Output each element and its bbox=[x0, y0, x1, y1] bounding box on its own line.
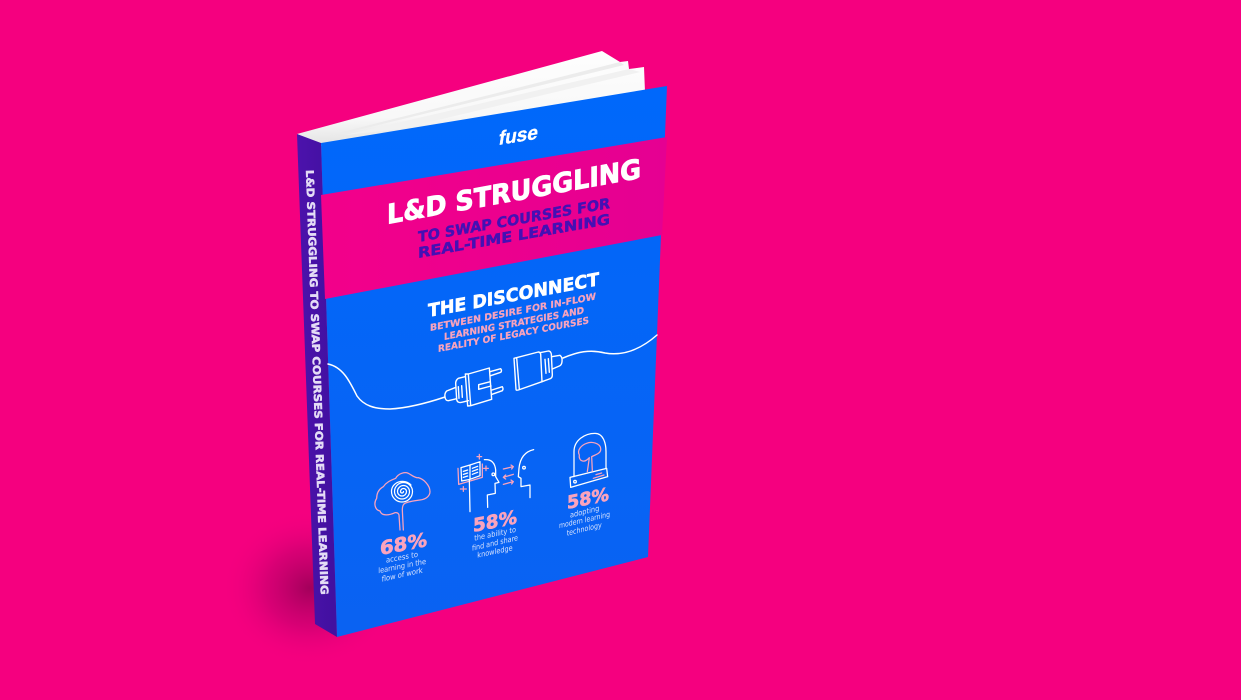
book front cover bbox=[321, 86, 667, 637]
disconnect description bbox=[430, 291, 597, 355]
stat: 58 percent knowledge: find and share bbox=[472, 533, 518, 553]
title: L&D struggling: L&D STRUGGLING bbox=[387, 154, 641, 231]
stat: 58 percent technology: technology bbox=[567, 520, 602, 538]
disconnect description: BETWEEN DESIRE FOR IN-FLOW bbox=[430, 291, 597, 334]
stat: 58 percent technology bbox=[559, 484, 610, 538]
spine title: L&D STRUGGLING TO SWAP COURSES FOR REAL-TIME LEARNING bbox=[303, 170, 330, 595]
icon: book and two heads sharing knowledge bbox=[458, 450, 534, 512]
icon: tree under glass dome bbox=[570, 433, 608, 487]
stat: 58 percent knowledge bbox=[472, 507, 518, 560]
stat: 58 percent knowledge: 58% bbox=[473, 507, 517, 537]
stat: 68 percent: access to bbox=[386, 550, 418, 565]
stat: 68 percent: 68% bbox=[380, 528, 427, 560]
logo: fuse: fuse bbox=[497, 122, 540, 150]
stat: 58 percent knowledge: the ability to bbox=[474, 525, 516, 543]
stat: 68 percent bbox=[378, 528, 427, 584]
subtitle: TO SWAP COURSES FOR bbox=[418, 195, 610, 246]
disconnect description: REALITY OF LEGACY COURSES bbox=[438, 315, 589, 355]
stat: 68 percent: learning in the bbox=[378, 557, 426, 575]
stat: 58 percent technology: adopting bbox=[570, 504, 599, 520]
stat: 68 percent: flow of work bbox=[382, 566, 423, 584]
icon: brain with fingerprint bbox=[375, 473, 430, 530]
disconnect description: LEARNING STRATEGIES AND bbox=[444, 305, 584, 343]
stat: 58 percent knowledge: knowledge bbox=[477, 543, 513, 560]
stat: 58 percent technology: modern learning bbox=[559, 510, 610, 530]
book spine bbox=[297, 134, 337, 637]
book drop shadow bbox=[222, 510, 398, 666]
stat: 58 percent technology: 58% bbox=[567, 484, 609, 514]
subtitle: REAL-TIME LEARNING bbox=[418, 211, 610, 262]
pink title band bbox=[321, 137, 667, 299]
book pages bbox=[297, 51, 645, 146]
heading: the disconnect: THE DISCONNECT bbox=[428, 269, 600, 322]
icon: unplugged cable bbox=[328, 335, 657, 409]
